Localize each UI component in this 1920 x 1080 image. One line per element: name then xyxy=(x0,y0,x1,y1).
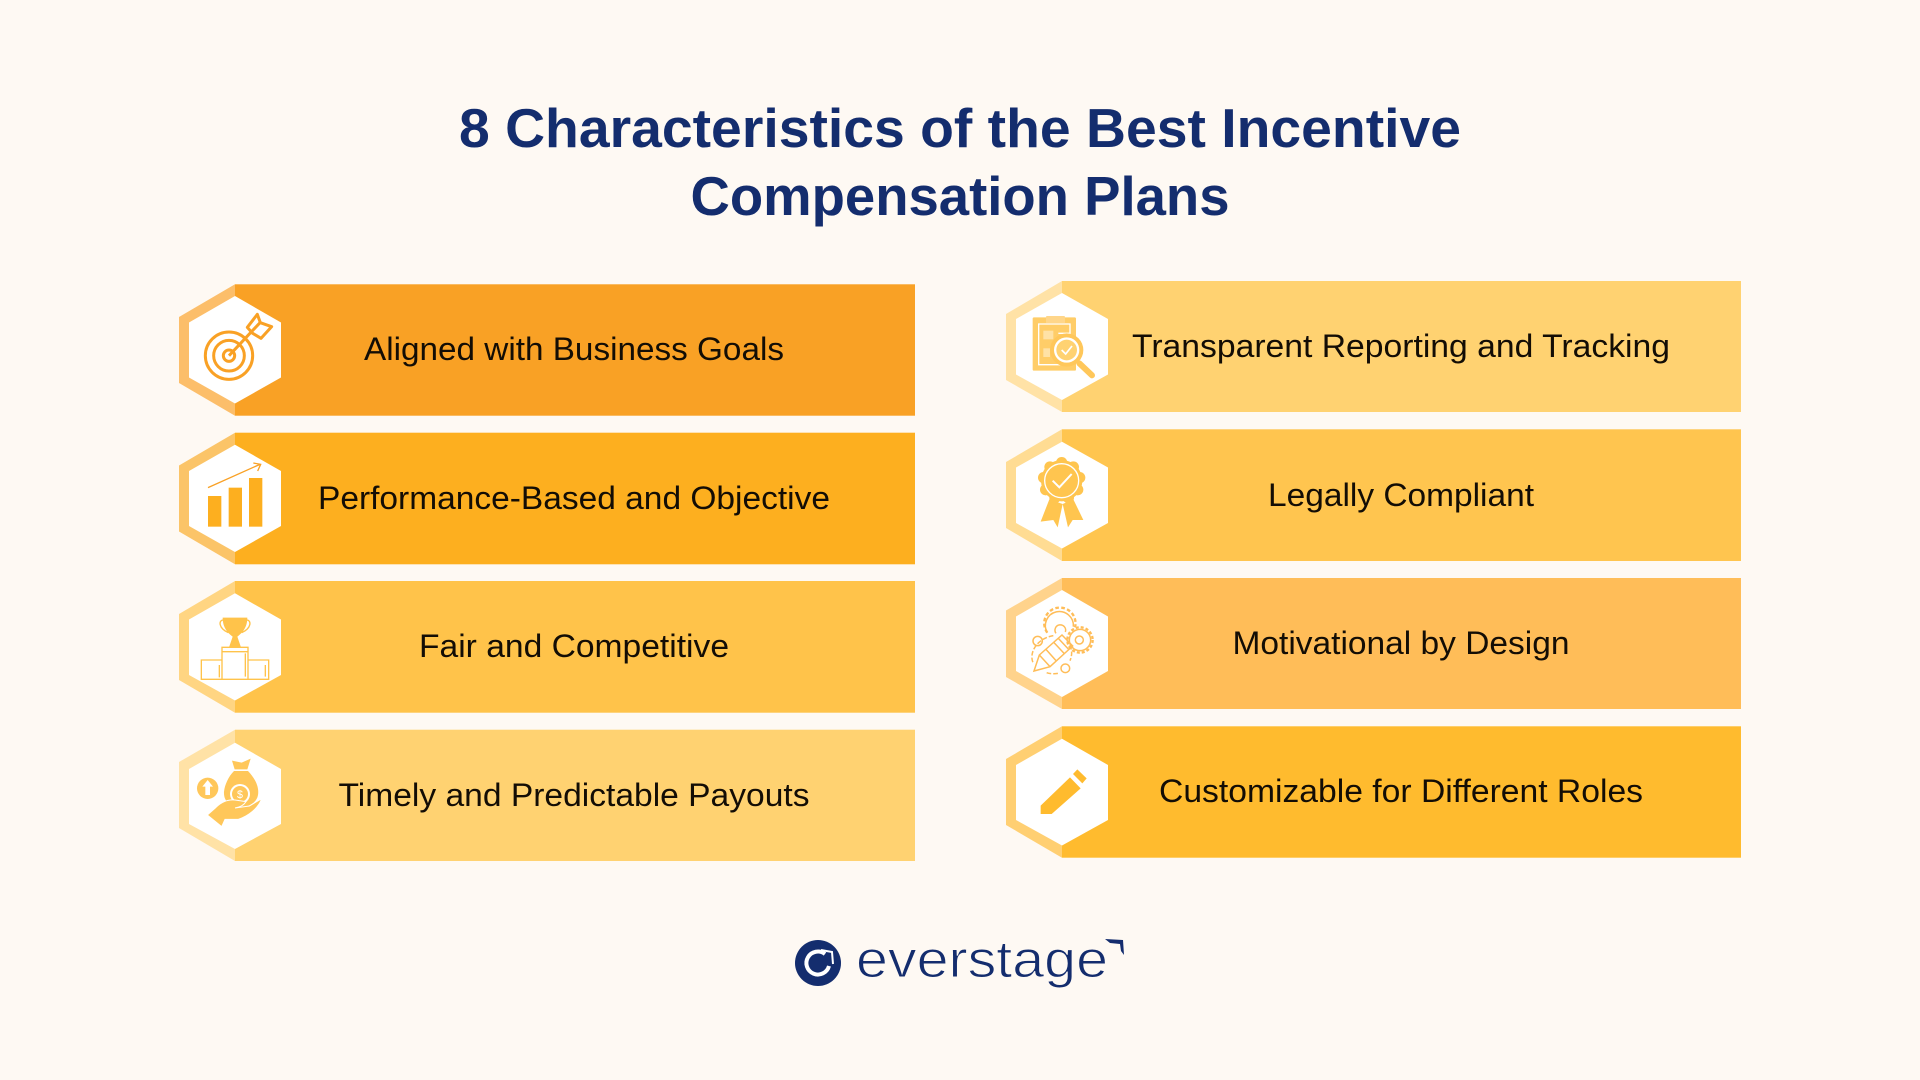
logo: everstage xyxy=(795,931,1124,989)
panel: Performance-Based and Objective: Performance-Based and Objective xyxy=(318,480,830,516)
panel: Legally Compliant: Legally Compliant xyxy=(1268,477,1534,513)
icon: compliance ribbon badge xyxy=(1038,457,1085,527)
panel: Aligned with Business Goals xyxy=(179,284,915,416)
panel: Performance-Based and Objective xyxy=(179,433,915,564)
icon: rising bar chart xyxy=(208,463,262,527)
panel: Customizable for Different Roles: Customizable for Different Roles xyxy=(1159,773,1643,809)
panel: Motivational by Design xyxy=(1006,578,1741,709)
icon: pencil and gears xyxy=(1032,608,1093,674)
panel: Transparent Reporting and Tracking: Transparent Reporting and Tracking xyxy=(1132,328,1670,364)
panel: Timely and Predictable Payouts: Timely and Predictable Payouts xyxy=(338,777,810,813)
icon: trophy on podium xyxy=(201,618,269,679)
icon: pencil xyxy=(1041,769,1087,814)
panel: Aligned with Business Goals: Aligned with Business Goals xyxy=(364,331,784,367)
icon: hand holding money bag xyxy=(197,759,262,827)
title xyxy=(459,97,1461,227)
icon: hand holding money bag: $ xyxy=(237,789,243,801)
panel: Timely and Predictable Payouts xyxy=(179,730,915,861)
icon: target with arrow xyxy=(205,314,272,379)
panel: Fair and Competitive: Fair and Competitive xyxy=(419,628,729,664)
logo: everstage: everstage xyxy=(856,931,1108,989)
title: Compensation Plans xyxy=(690,165,1230,227)
panel: Motivational by Design: Motivational by Design xyxy=(1232,625,1570,661)
panel: Legally Compliant xyxy=(1006,429,1741,561)
panel: Fair and Competitive xyxy=(179,581,915,713)
panel: Transparent Reporting and Tracking xyxy=(1006,281,1741,412)
panel: Customizable for Different Roles xyxy=(1006,726,1741,858)
title: 8 Characteristics of the Best Incentive xyxy=(459,97,1461,159)
icon: clipboard with magnifier xyxy=(1033,316,1092,375)
